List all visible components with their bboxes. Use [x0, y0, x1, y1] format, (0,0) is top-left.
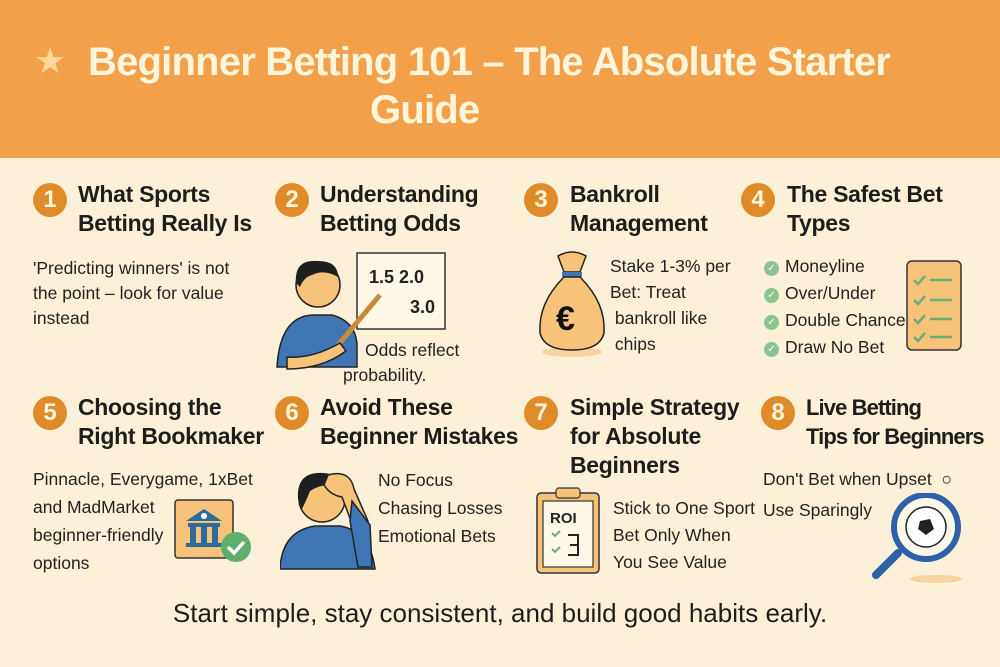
number 5	[33, 396, 67, 430]
number 6	[275, 396, 309, 430]
checklist: Draw No Bet	[785, 337, 884, 357]
body 5: beginner-friendly	[33, 525, 163, 545]
number 3	[524, 183, 558, 217]
body 3: bankroll like	[615, 308, 707, 328]
heading 1: Betting Really Is	[78, 210, 252, 236]
icon: ROI clipboard	[536, 487, 600, 574]
header band	[0, 0, 1000, 158]
illustration: person with odds board: 3.0	[410, 297, 435, 317]
heading 7: for Absolute	[570, 423, 701, 449]
title: ★	[34, 40, 65, 81]
heading 4: The Safest Bet	[787, 181, 943, 207]
title	[34, 40, 890, 132]
illustration: person with odds board: 1.5 2.0	[369, 267, 424, 287]
body 6: Chasing Losses	[378, 498, 503, 518]
panel 8	[761, 395, 984, 583]
heading 5	[78, 394, 264, 449]
heading 2	[320, 181, 478, 236]
caption 2	[343, 340, 460, 385]
body 1	[33, 258, 230, 328]
number 7	[524, 396, 558, 430]
checklist: ✓	[767, 263, 776, 274]
number 5: 5	[43, 399, 57, 426]
body 3: chips	[615, 334, 656, 354]
heading 3	[570, 181, 708, 236]
panel 5	[33, 394, 264, 573]
body 7: Stick to One Sport	[613, 498, 755, 518]
heading 8: Live Betting	[806, 395, 921, 420]
icon: ROI clipboard: ROI	[550, 510, 577, 527]
caption 2: probability.	[343, 365, 426, 385]
body 5: options	[33, 553, 89, 573]
heading 3: Management	[570, 210, 708, 236]
body 3	[610, 256, 731, 354]
body 3: Stake 1-3% per	[610, 256, 731, 276]
body 7	[613, 498, 755, 572]
heading 7: Simple Strategy	[570, 394, 739, 420]
heading 5: Choosing the	[78, 394, 221, 420]
panel 1	[33, 181, 252, 328]
number 1: 1	[43, 186, 57, 213]
illustration: stressed person	[280, 472, 376, 570]
checklist: ✓	[767, 344, 776, 355]
body 6: No Focus	[378, 470, 453, 490]
icon: money bag	[539, 251, 605, 357]
number 8: 8	[771, 399, 785, 426]
body 3: Bet: Treat	[610, 282, 686, 302]
number 6: 6	[285, 399, 299, 426]
heading 5: Right Bookmaker	[78, 423, 264, 449]
heading 6	[320, 394, 518, 449]
body 6	[378, 470, 503, 546]
heading 8	[806, 395, 984, 449]
heading 2: Betting Odds	[320, 210, 461, 236]
checklist: Double Chance	[785, 310, 906, 330]
heading 6: Avoid These	[320, 394, 453, 420]
number 4: 4	[751, 186, 765, 213]
heading 8: Tips for Beginners	[806, 424, 984, 449]
number 2: 2	[285, 186, 299, 213]
icon: clipboard checklist	[906, 260, 962, 351]
illustration: person with odds board	[276, 252, 446, 370]
body 7: Bet Only When	[613, 525, 731, 545]
checklist: ✓	[767, 317, 776, 328]
heading 4	[787, 181, 943, 236]
icon: bank with check	[174, 499, 251, 562]
number 4	[741, 183, 775, 217]
body 5: and MadMarket	[33, 497, 155, 517]
body 1: the point – look for value	[33, 283, 224, 303]
panel 2	[275, 181, 478, 385]
checklist: Moneyline	[785, 256, 865, 276]
panel 3	[524, 181, 731, 357]
icon: magnifier with ball	[872, 493, 962, 583]
heading 6: Beginner Mistakes	[320, 423, 518, 449]
panel 6	[275, 394, 518, 570]
number 3: 3	[534, 186, 548, 213]
number 1	[33, 183, 67, 217]
number 2	[275, 183, 309, 217]
checklist: Over/Under	[785, 283, 875, 303]
checklist	[764, 256, 906, 357]
caption 2: Odds reflect	[365, 340, 459, 360]
icon: money bag: €	[556, 300, 575, 338]
heading 1: What Sports	[78, 181, 210, 207]
body 8: Don't Bet when Upset ○	[763, 469, 952, 489]
body 1: instead	[33, 308, 89, 328]
heading 2: Understanding	[320, 181, 478, 207]
heading 4: Types	[787, 210, 850, 236]
number 7: 7	[534, 399, 548, 426]
body 1: 'Predicting winners' is not	[33, 258, 229, 278]
body 5: Pinnacle, Everygame, 1xBet	[33, 469, 253, 489]
checklist: ✓	[767, 290, 776, 301]
body 7: You See Value	[613, 552, 727, 572]
title: Beginner Betting 101 – The Absolute Starter	[88, 40, 890, 84]
body 8	[763, 469, 952, 520]
heading 1	[78, 181, 252, 236]
footer tagline: Start simple, stay consistent, and build good habits early.	[173, 598, 827, 628]
heading 7	[570, 394, 740, 478]
heading 7: Beginners	[570, 452, 680, 478]
body 6: Emotional Bets	[378, 526, 496, 546]
heading 3: Bankroll	[570, 181, 660, 207]
panel 7	[524, 394, 755, 574]
body 8: Use Sparingly	[763, 500, 872, 520]
title: Guide	[370, 88, 479, 132]
number 8	[761, 396, 795, 430]
panel 4	[741, 181, 962, 357]
body 5	[33, 469, 253, 573]
